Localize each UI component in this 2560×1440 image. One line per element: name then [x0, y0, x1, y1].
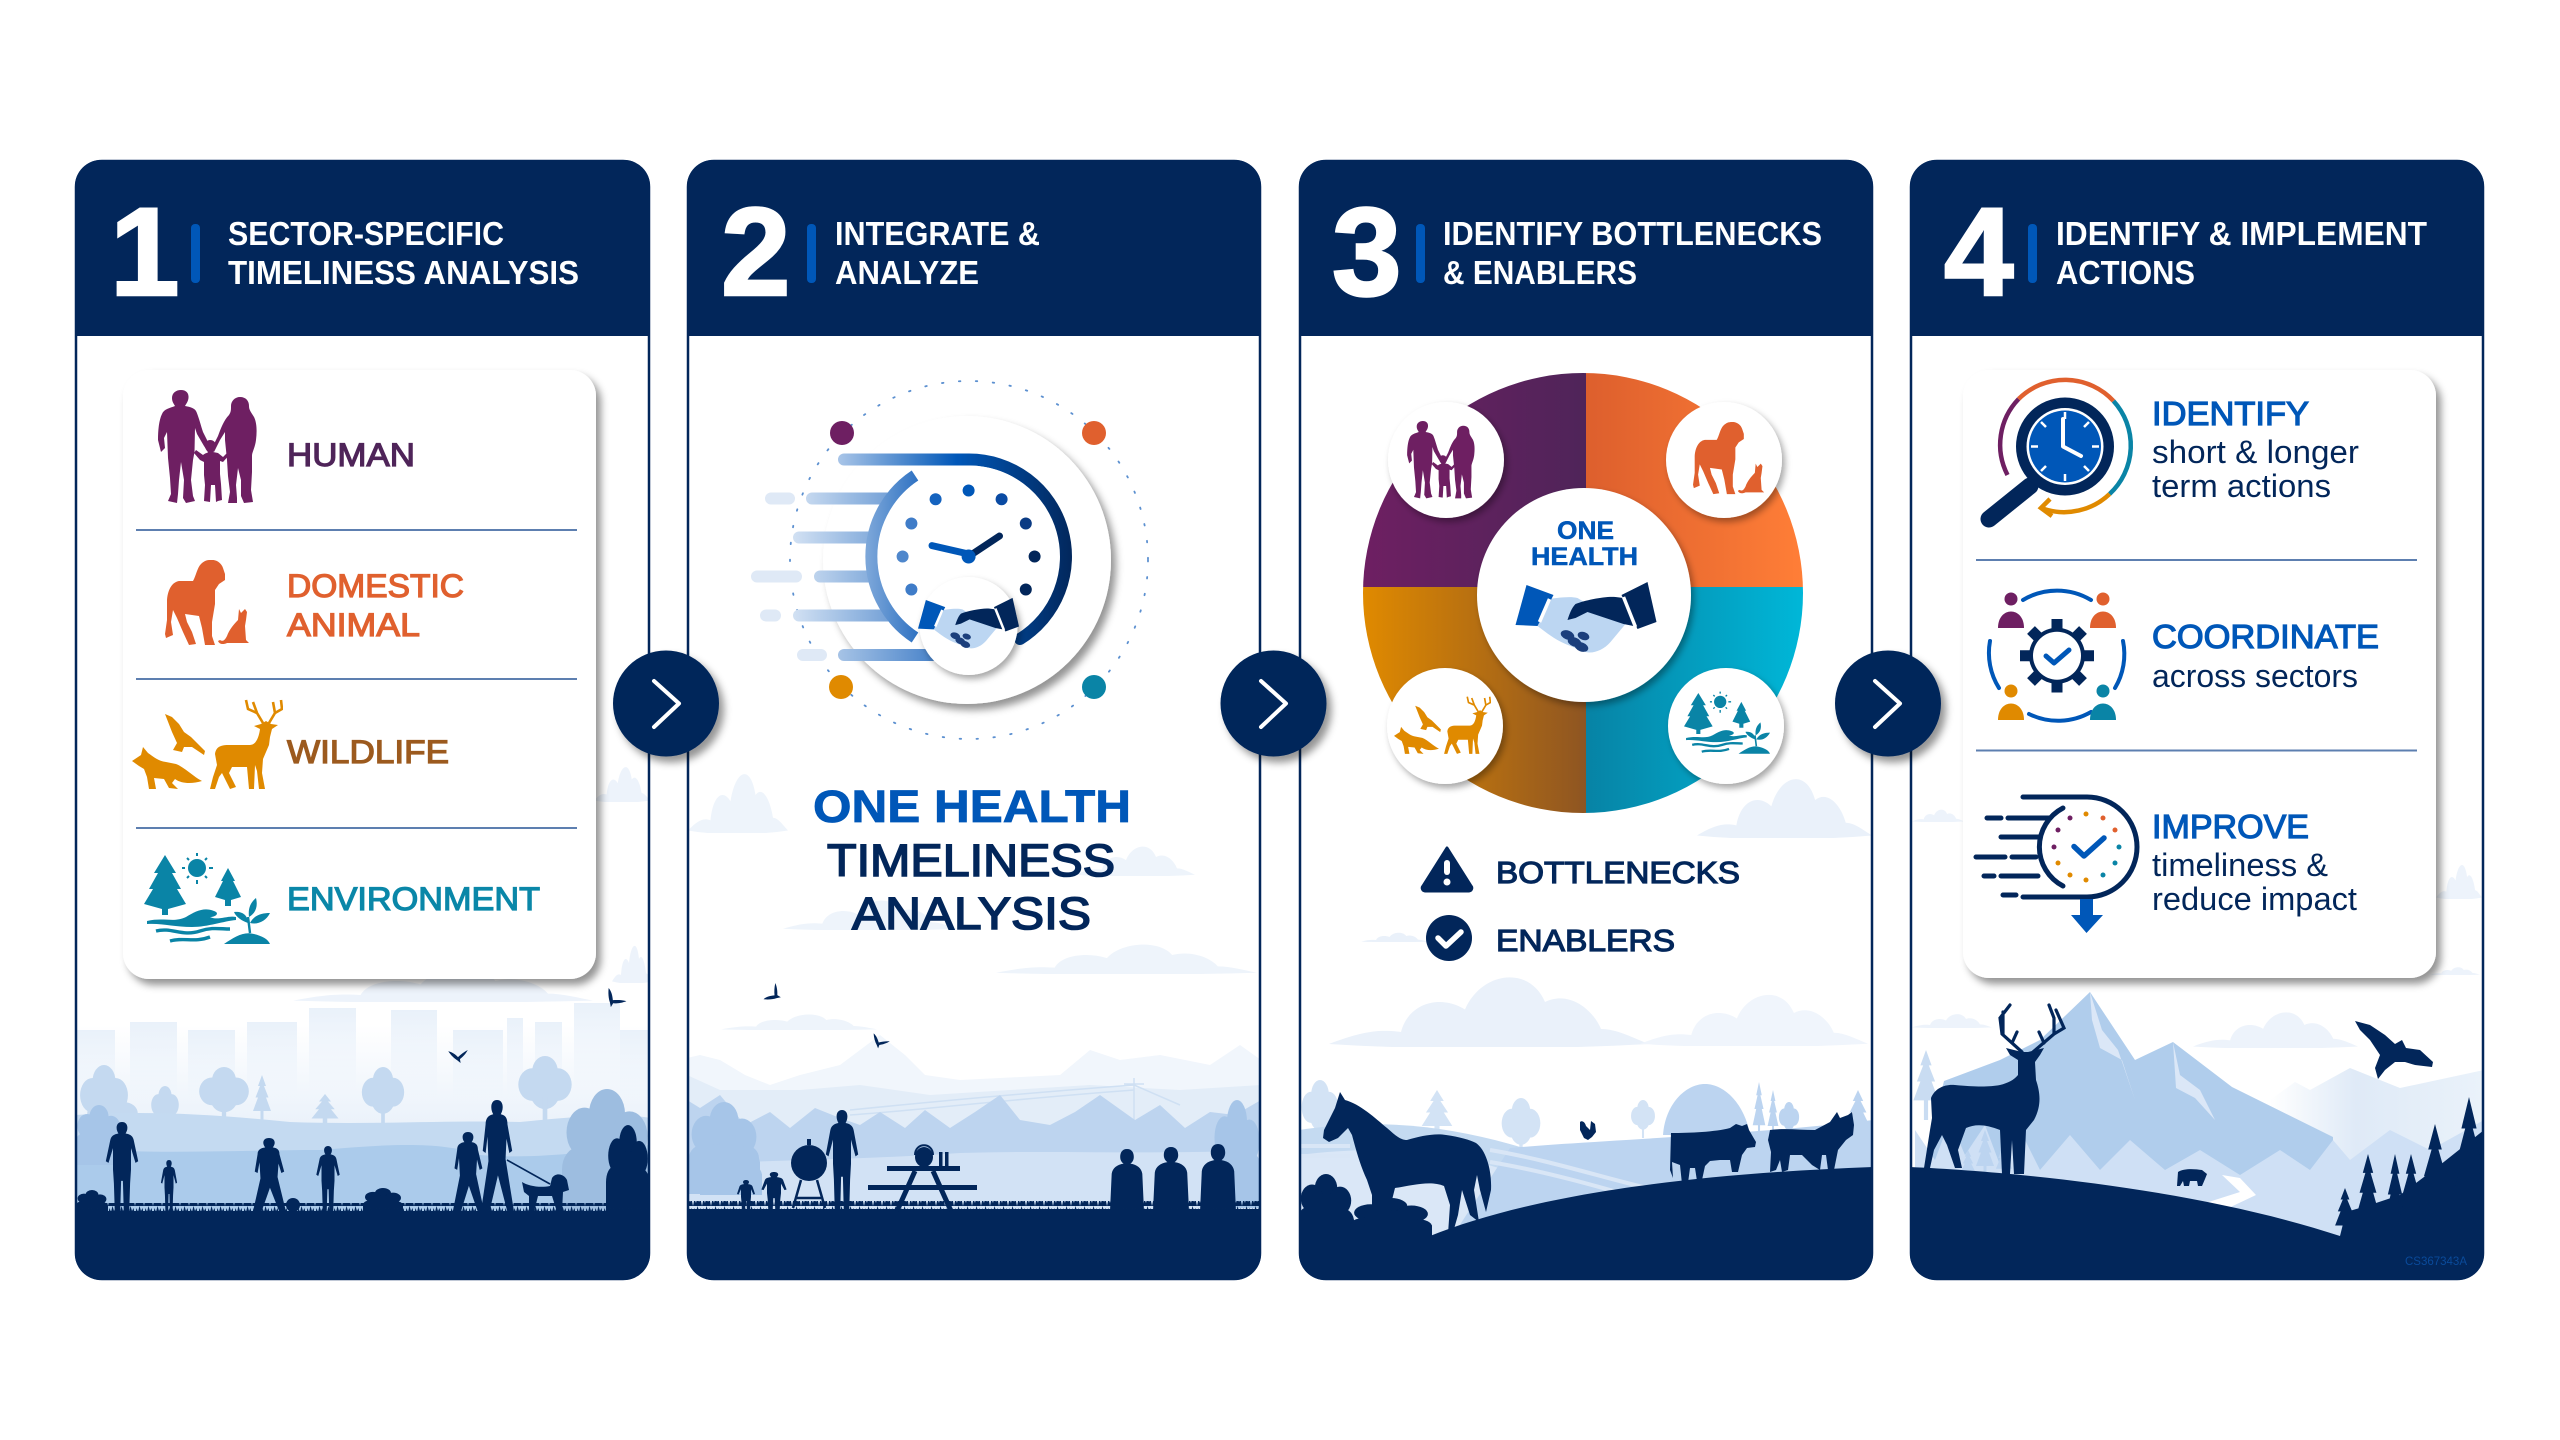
text: improve — [2152, 808, 2357, 917]
people in the park — [106, 1100, 514, 1212]
header 4: 4 — [1944, 183, 2014, 322]
hill and forest floor — [1910, 1130, 2484, 1281]
label: domestic animal: ANIMAL — [287, 607, 420, 643]
header 3 — [1299, 160, 1873, 336]
children — [737, 1172, 787, 1212]
icon: warning triangle — [1422, 848, 1472, 891]
header 3: 3 — [1332, 183, 1402, 322]
text: coordinate: COORDINATE — [2152, 618, 2379, 655]
infographic: four-step One Health process — [74, 160, 2484, 1280]
header 2 — [687, 160, 1261, 336]
picnic table with basket — [868, 1145, 977, 1211]
text: improve: reduce impact — [2152, 881, 2357, 917]
header 4: ACTIONS — [2056, 254, 2195, 291]
icon: check mark — [1426, 915, 1472, 961]
horse — [1323, 1092, 1491, 1236]
panel 1: sector-specific timeliness analysis — [75, 160, 652, 1281]
legend: bottlenecks and enablers: BOTTLENECKS — [1496, 855, 1740, 890]
bushes — [1301, 1174, 1432, 1236]
text: identify: IDENTIFY — [2152, 395, 2309, 432]
icon: improve clock with arrow — [1976, 797, 2137, 933]
header 2: INTEGRATE & — [835, 215, 1040, 252]
card: four sectors — [123, 370, 596, 979]
title: one health timeliness analysis: TIMELINESS — [827, 835, 1115, 886]
panel 3: identify bottlenecks and enablers — [1298, 160, 1873, 1281]
clouds and landscape: picnic scene — [687, 774, 1262, 1281]
dog on a leash — [507, 1160, 569, 1212]
panel 4: identify and implement actions — [1910, 160, 2486, 1281]
wildlife badge — [1387, 668, 1503, 784]
header 4 — [1910, 160, 2484, 336]
title: one health timeliness analysis: ONE HEALTH — [813, 781, 1131, 832]
text: coordinate — [2152, 618, 2379, 694]
arrow: step 3 to 4 — [1835, 650, 1941, 756]
quadrant: wildlife — [1360, 587, 1586, 817]
mountain — [1932, 992, 2333, 1175]
pine forest — [2335, 1097, 2477, 1226]
chart: One Health wheel — [1360, 370, 1812, 817]
seated family — [1110, 1144, 1236, 1212]
header 4: IDENTIFY & IMPLEMENT — [2056, 215, 2427, 252]
header 3: IDENTIFY BOTTLENECKS — [1443, 215, 1822, 252]
grass edge — [689, 1201, 1259, 1209]
icon: human family — [158, 390, 257, 503]
clock hands — [932, 536, 1000, 560]
title: one health timeliness analysis — [813, 781, 1131, 939]
bull — [1768, 1112, 1854, 1172]
domestic animal badge — [1666, 402, 1782, 518]
header 2: ANALYZE — [835, 254, 979, 291]
clouds and landscape: family park scene — [75, 767, 652, 1281]
grass edge — [106, 1203, 606, 1211]
birds — [762, 983, 890, 1052]
text: identify — [2152, 395, 2359, 504]
colored sector dots — [829, 421, 1106, 699]
icon: wildlife — [132, 700, 282, 789]
arrow: step 1 to 2 — [613, 650, 719, 756]
quadrant: domestic animal — [1586, 370, 1812, 587]
legend: bottlenecks and enablers — [1422, 848, 1740, 961]
icon: timeliness clock with handshake — [757, 381, 1148, 739]
legend: bottlenecks and enablers: ENABLERS — [1496, 923, 1675, 958]
header 1 — [75, 160, 650, 336]
arrow: step 2 to 3 — [1220, 650, 1326, 756]
human badge — [1388, 402, 1504, 518]
clouds and landscape: mountain wildlife scene — [1910, 810, 2486, 1281]
clock face dots — [897, 484, 1041, 596]
label: human: HUMAN — [287, 437, 415, 473]
bear — [2177, 1169, 2207, 1186]
icon: dog and cat — [165, 560, 249, 645]
eagle — [2355, 1021, 2433, 1079]
label: environment: ENVIRONMENT — [287, 881, 540, 917]
label: domestic animal — [287, 568, 464, 643]
text: improve: timeliness & — [2152, 847, 2328, 883]
label: wildlife: WILDLIFE — [287, 734, 449, 770]
header 2: 2 — [721, 183, 791, 322]
title: one health timeliness analysis: ANALYSIS — [852, 888, 1091, 939]
text: coordinate: across sectors — [2152, 658, 2358, 694]
header 1: SECTOR-SPECIFIC — [228, 215, 504, 252]
watermark code: CS367343A — [2405, 1254, 2467, 1268]
header 1: 1 — [110, 183, 180, 322]
hill — [1299, 1167, 1873, 1281]
rooster — [1580, 1121, 1596, 1140]
header 1: TIMELINESS ANALYSIS — [228, 254, 579, 291]
text: improve: IMPROVE — [2152, 808, 2309, 845]
panel 2: integrate and analyze — [687, 160, 1262, 1281]
label: one health: HEALTH — [1531, 543, 1638, 571]
icon: environment — [144, 853, 270, 944]
label: domestic animal: DOMESTIC — [287, 568, 464, 604]
card: actions — [1963, 370, 2436, 978]
handshake — [1516, 582, 1656, 654]
text: identify: short & longer — [2152, 434, 2359, 470]
clouds and landscape: farm scene — [1298, 779, 1873, 1281]
birds — [448, 987, 626, 1063]
label: one health: ONE — [1557, 517, 1614, 545]
bushes — [76, 1125, 650, 1214]
quadrant: environment — [1586, 587, 1812, 817]
cow — [1670, 1124, 1756, 1184]
label: one health — [1531, 517, 1638, 571]
text: identify: term actions — [2152, 468, 2331, 504]
speed lines — [799, 498, 933, 655]
deer — [1924, 1005, 2064, 1174]
kettle grill — [791, 1139, 827, 1208]
header 3: & ENABLERS — [1443, 254, 1637, 291]
icon: coordination gear and people — [1989, 591, 2124, 721]
icon: magnifier over clock — [1989, 380, 2131, 519]
handshake — [918, 598, 1019, 649]
quadrant: human — [1360, 370, 1586, 587]
environment badge — [1668, 668, 1784, 784]
griller — [826, 1110, 858, 1212]
